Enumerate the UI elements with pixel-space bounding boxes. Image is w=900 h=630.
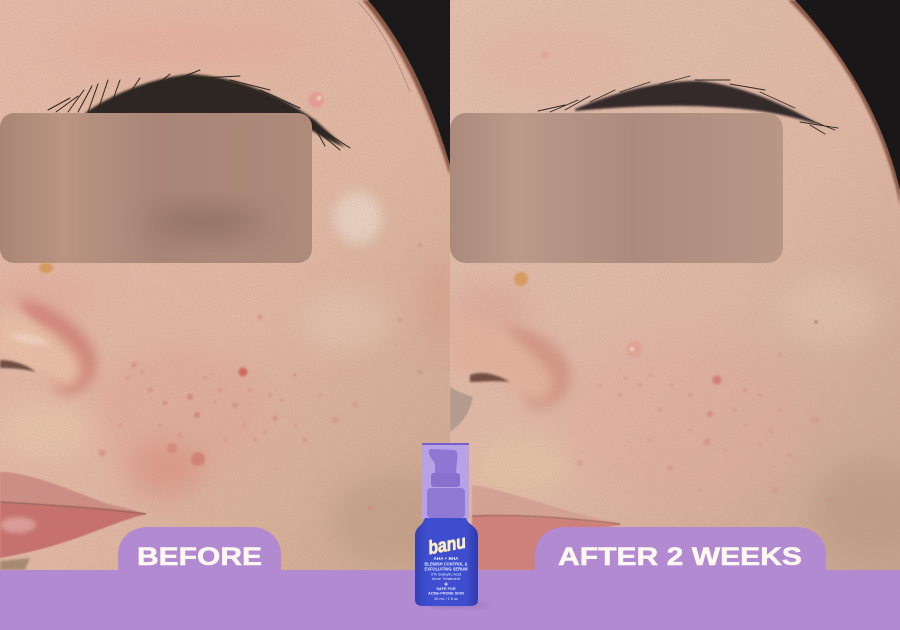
label: before [118, 527, 281, 571]
eyebrow, after [538, 76, 838, 134]
bottle body: banu [427, 532, 468, 559]
label: after 2 weeks: AFTER 2 WEEKS [558, 543, 802, 571]
label: before: BEFORE [137, 543, 262, 571]
bottle body: ACNE-PRONE SKIN [428, 592, 464, 596]
pimple on brow [308, 92, 324, 108]
bottle body: + [444, 582, 448, 588]
bottle body: EXFOLIATING SERUM [424, 566, 468, 572]
after photo panel [450, 0, 900, 570]
eyebrow, before [48, 70, 350, 150]
bottle body: AHA + BHA [434, 556, 459, 561]
label: after 2 weeks [535, 527, 826, 571]
bottom purple band [0, 570, 900, 630]
nose, before [0, 298, 96, 395]
redness spots, after [542, 52, 832, 502]
bottle body: 2% Salicylic Acid [431, 572, 461, 576]
skin texture, after [450, 0, 900, 570]
mole, before [39, 263, 53, 273]
bottle body: 30 mL / 1 fl oz [434, 597, 458, 601]
hijab, before [358, 0, 450, 176]
before photo panel [0, 0, 470, 570]
bottle body: SAFE FOR [436, 587, 456, 591]
skin texture, before [0, 0, 450, 570]
lips, before [0, 472, 147, 558]
product bottle [415, 443, 488, 608]
blurred eye box, before [0, 113, 312, 263]
nose, after [450, 310, 571, 432]
bottle cap [422, 443, 469, 519]
mole, after [514, 272, 528, 286]
redness spots, before [98, 243, 422, 510]
bottle body: Acne Treatment [432, 576, 461, 581]
hijab, after [788, 0, 900, 205]
bottle body [415, 518, 478, 606]
blurred eye box, after [450, 113, 783, 263]
lips, after [472, 485, 622, 570]
bottle body: BLEMISH CONTROL & [424, 562, 468, 566]
